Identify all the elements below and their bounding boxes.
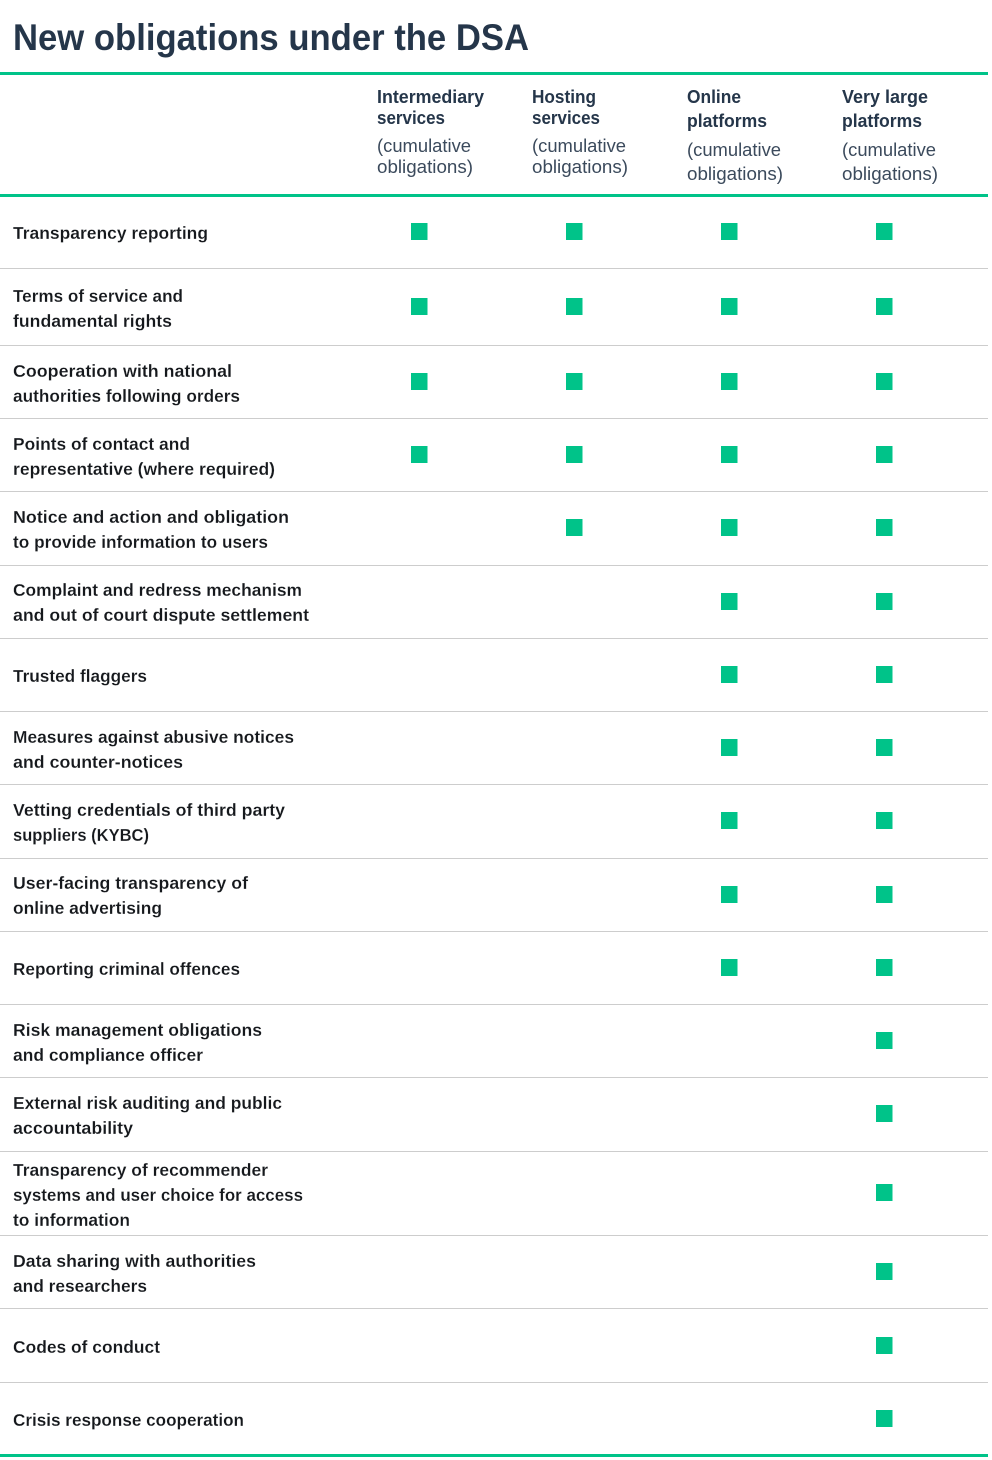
row: Risk management [13, 1020, 892, 1065]
row: External risk auditing: accountability [13, 1118, 133, 1138]
title: New obligations under the DSA [13, 17, 529, 58]
row: User-facing transparency [13, 873, 892, 918]
row: Data sharing: and researchers [13, 1276, 147, 1296]
row: Complaint and redress: and out of court dispute settlement [13, 605, 309, 625]
column header: Intermediary services: services [377, 108, 445, 128]
row: Transparency of recommender systems: to information [13, 1210, 130, 1230]
row: Data sharing: Data sharing with authorities [13, 1251, 256, 1271]
column header: Hosting services: (cumulative [532, 135, 626, 156]
row: Transparency of recommender systems: systems and user choice for access [13, 1185, 303, 1205]
row: Points of contact: representative (where required) [13, 459, 275, 479]
row: Notice and action [13, 507, 892, 552]
row: Reporting criminal offences [13, 959, 892, 979]
row: Trusted flaggers [13, 666, 892, 686]
row: Terms of service: fundamental rights [13, 311, 172, 331]
column header: Online platforms: platforms [687, 111, 767, 131]
row: Risk management: and compliance officer [13, 1045, 203, 1065]
row: Terms of service: Terms of service and [13, 286, 183, 306]
column header: Very large platforms: platforms [842, 111, 922, 131]
row: Notice and action: to provide information to users [13, 532, 268, 552]
column header: Hosting services: Hosting [532, 87, 596, 107]
row: Reporting criminal offences: Reporting criminal offences [13, 959, 240, 979]
column header: Online platforms: obligations) [687, 163, 783, 184]
row: Cooperation with national authorities: Cooperation with national [13, 361, 232, 381]
row: Points of contact: Points of contact and [13, 434, 190, 454]
row: User-facing transparency: User-facing transparency of [13, 873, 248, 893]
column header: Very large platforms: (cumulative [842, 139, 936, 160]
row: Notice and action: Notice and action and obligation [13, 507, 289, 527]
row: Crisis response cooperation [13, 1410, 892, 1430]
row: Transparency of recommender systems: Transparency of recommender [13, 1160, 268, 1180]
row: Risk management: Risk management obligations [13, 1020, 262, 1040]
column header: Hosting services [532, 87, 628, 177]
row: Transparency reporting [13, 223, 892, 243]
row: Codes of conduct: Codes of conduct [13, 1337, 160, 1357]
column header: Intermediary services: Intermediary [377, 87, 484, 107]
row: Complaint and redress: Complaint and redress mechanism [13, 580, 302, 600]
row: Data sharing [13, 1251, 892, 1296]
row: Crisis response cooperation: Crisis response cooperation [13, 1410, 244, 1430]
row: Vetting credentials: Vetting credentials of third party [13, 800, 285, 820]
row: Vetting credentials [13, 800, 892, 845]
row: Measures against abusive notices [13, 727, 892, 772]
column header: Online platforms [687, 87, 783, 184]
row: Transparency reporting: Transparency reporting [13, 223, 208, 243]
row: User-facing transparency: online advertising [13, 898, 162, 918]
column header: Very large platforms: Very large [842, 87, 928, 107]
row: External risk auditing: External risk auditing and public [13, 1093, 282, 1113]
row: Transparency of recommender systems [13, 1160, 892, 1230]
column header: Online platforms: Online [687, 87, 741, 107]
column header: Intermediary services [377, 87, 484, 177]
row: Terms of service [13, 286, 892, 331]
column header: Online platforms: (cumulative [687, 139, 781, 160]
column header: Very large platforms [842, 87, 938, 184]
row: Codes of conduct [13, 1337, 892, 1357]
column header: Hosting services: obligations) [532, 156, 628, 177]
row: Measures against abusive notices: and counter-notices [13, 752, 183, 772]
row: Complaint and redress [13, 580, 892, 625]
column header: Hosting services: services [532, 108, 600, 128]
row: Vetting credentials: suppliers (KYBC) [13, 825, 149, 845]
row: Trusted flaggers: Trusted flaggers [13, 666, 147, 686]
column header: Intermediary services: (cumulative [377, 135, 471, 156]
row: Points of contact [13, 434, 892, 479]
row: Cooperation with national authorities: authorities following orders [13, 386, 240, 406]
row: External risk auditing [13, 1093, 892, 1138]
row: Cooperation with national authorities [13, 361, 892, 406]
row: Measures against abusive notices: Measures against abusive notices [13, 727, 294, 747]
column header: Intermediary services: obligations) [377, 156, 473, 177]
column header: Very large platforms: obligations) [842, 163, 938, 184]
